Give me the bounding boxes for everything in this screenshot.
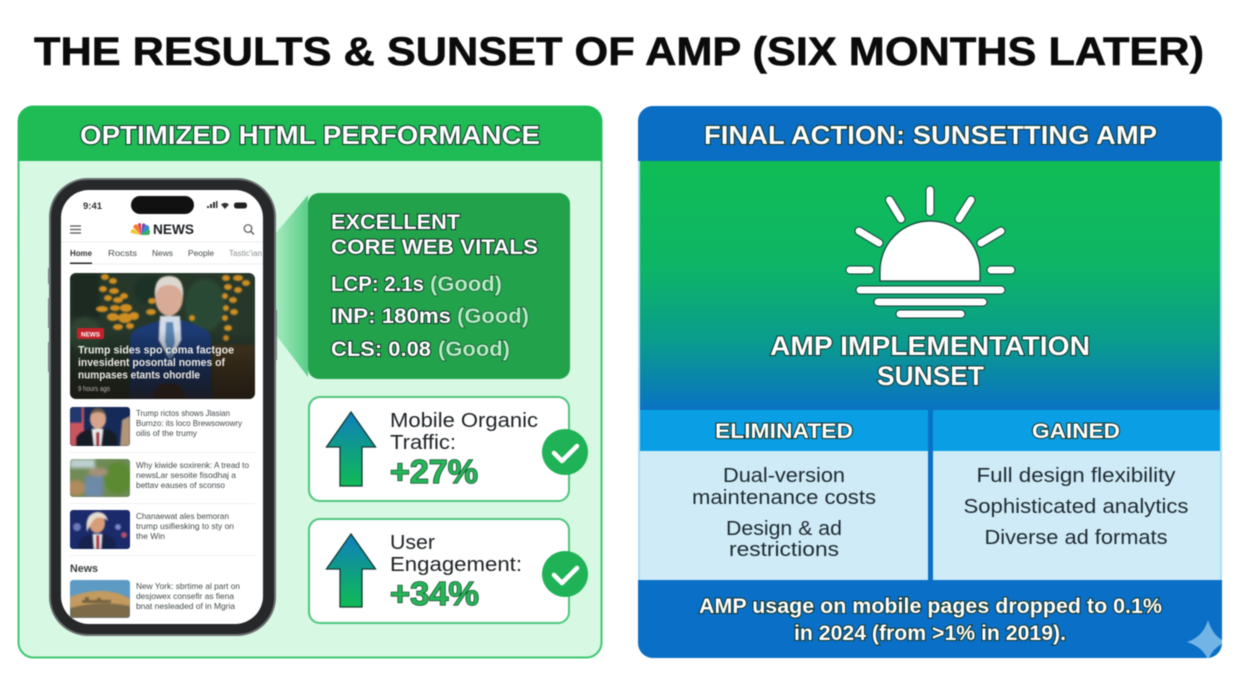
tab row: Rocsts	[108, 249, 137, 258]
status bar: 9:41	[83, 201, 103, 212]
callout heading: CORE WEB VITALS	[331, 235, 538, 259]
card: user engagement	[309, 519, 588, 623]
metric label: Engagement:	[390, 554, 522, 576]
hero news photo: Trump sides spo coma factgoe	[78, 344, 234, 356]
panel background	[18, 106, 602, 658]
card: mobile organic traffic	[309, 397, 588, 501]
eliminated items: restrictions	[729, 539, 839, 561]
gained items	[964, 465, 1188, 549]
metric label: User	[390, 532, 435, 554]
tab row: Home	[70, 249, 93, 258]
hero news photo: 9 hours ago	[78, 386, 110, 393]
hero news photo: NEWS	[81, 332, 101, 338]
news logo: NEWS	[153, 221, 194, 237]
metric label: Mobile Organic	[390, 410, 538, 432]
metric label	[390, 410, 538, 454]
panel header: OPTIMIZED HTML PERFORMANCE	[80, 120, 540, 150]
column: eliminated	[640, 410, 928, 580]
column: gained: GAINED	[1032, 420, 1120, 443]
news item 1: Burnzo: its loco Brewsowowry	[136, 418, 243, 428]
gained items: Sophisticated analytics	[964, 496, 1188, 518]
app navigation	[61, 221, 263, 242]
sunset heading: SUNSET	[877, 361, 984, 391]
sunset heading: AMP IMPLEMENTATION	[770, 331, 1090, 361]
panel header	[18, 106, 602, 161]
metric value: +27%	[390, 453, 478, 490]
news item 1: oilis of the trumy	[136, 428, 198, 438]
metric: LCP: LCP: 2.1s	[331, 272, 424, 296]
news item 2: bettav eauses of sconso	[136, 480, 225, 490]
tab row	[70, 249, 263, 264]
metric: CLS	[331, 337, 510, 361]
news item 2: newsLar sesoite fisodhaj a	[136, 470, 236, 480]
metric: LCP: (Good)	[430, 272, 502, 296]
tab row: People	[188, 249, 215, 258]
eliminated items: maintenance costs	[692, 487, 876, 509]
panel: final action sunsetting amp	[638, 106, 1226, 660]
panel background	[638, 106, 1222, 658]
foliage	[96, 274, 250, 341]
icon: check badge	[542, 429, 588, 475]
news item 4: desjowex consefir as fiena	[136, 591, 234, 601]
phone mockup	[48, 179, 277, 635]
column: gained	[933, 410, 1220, 580]
news item 2: Why kiwide soxirenk: A tread to	[136, 460, 249, 470]
panel header: FINAL ACTION: SUNSETTING AMP	[704, 120, 1157, 150]
title: THE RESULTS & SUNSET OF AMP (SIX MONTHS LATER)	[34, 30, 1204, 74]
metric: LCP	[331, 272, 502, 296]
news item 3: trump usifiesking to sty on	[136, 521, 234, 531]
eliminated items	[692, 465, 876, 561]
icon: check badge	[542, 551, 588, 597]
eliminated items: Dual-version	[723, 465, 845, 487]
section heading: news: News	[70, 563, 98, 575]
tab row: News	[152, 249, 173, 258]
metric: INP: (Good)	[457, 304, 529, 328]
phone body	[48, 179, 277, 635]
status bar	[83, 196, 247, 214]
column: eliminated: ELIMINATED	[715, 420, 853, 443]
metric: INP	[331, 304, 529, 328]
person	[130, 276, 211, 399]
news item 1	[70, 407, 243, 446]
icon: up arrow	[326, 534, 376, 607]
gained items: Full design flexibility	[976, 465, 1176, 487]
panel: optimized html performance	[18, 106, 602, 658]
icon: sparkle	[1187, 620, 1222, 658]
icon: setting sun	[850, 190, 1011, 314]
sunset heading	[770, 331, 1090, 391]
news item 2	[67, 459, 249, 497]
hero news photo	[69, 273, 255, 399]
metric label	[390, 532, 522, 576]
eliminated items: Design & ad	[726, 518, 842, 540]
connector from phone to callout	[276, 195, 308, 377]
metric label: Traffic:	[390, 432, 456, 454]
news item 3	[70, 510, 234, 549]
news item 3: Chanaewat ales bemoran	[136, 511, 229, 521]
metric: CLS: CLS: 0.08	[331, 337, 431, 361]
news item 4: New York: sbrtime al part on	[136, 581, 240, 591]
news item 3: the Win	[136, 531, 165, 541]
metric: CLS: (Good)	[438, 337, 510, 361]
icon: up arrow	[326, 412, 376, 486]
gained items: Diverse ad formats	[984, 527, 1168, 549]
metric value: +34%	[390, 575, 479, 612]
footer statistic	[699, 595, 1162, 645]
callout: core web vitals	[308, 193, 570, 379]
callout heading: EXCELLENT	[331, 210, 460, 234]
news item 4: bnat nesleaded of in Mgria	[136, 601, 235, 611]
hero news photo: invesident posontal nomes of	[78, 357, 225, 369]
footer statistic: in 2024 (from >1% in 2019).	[794, 622, 1066, 645]
news item 4	[70, 580, 240, 618]
metric: INP: INP: 180ms	[331, 304, 451, 328]
news item 1: Trump rictos shows Jlasian	[136, 408, 230, 418]
tab row: Tastic'ian	[229, 249, 262, 258]
callout heading	[331, 210, 538, 259]
news logo	[131, 221, 194, 237]
footer statistic: AMP usage on mobile pages dropped to 0.1%	[699, 595, 1162, 618]
hero news photo: numpases etants ohordle	[78, 370, 200, 382]
